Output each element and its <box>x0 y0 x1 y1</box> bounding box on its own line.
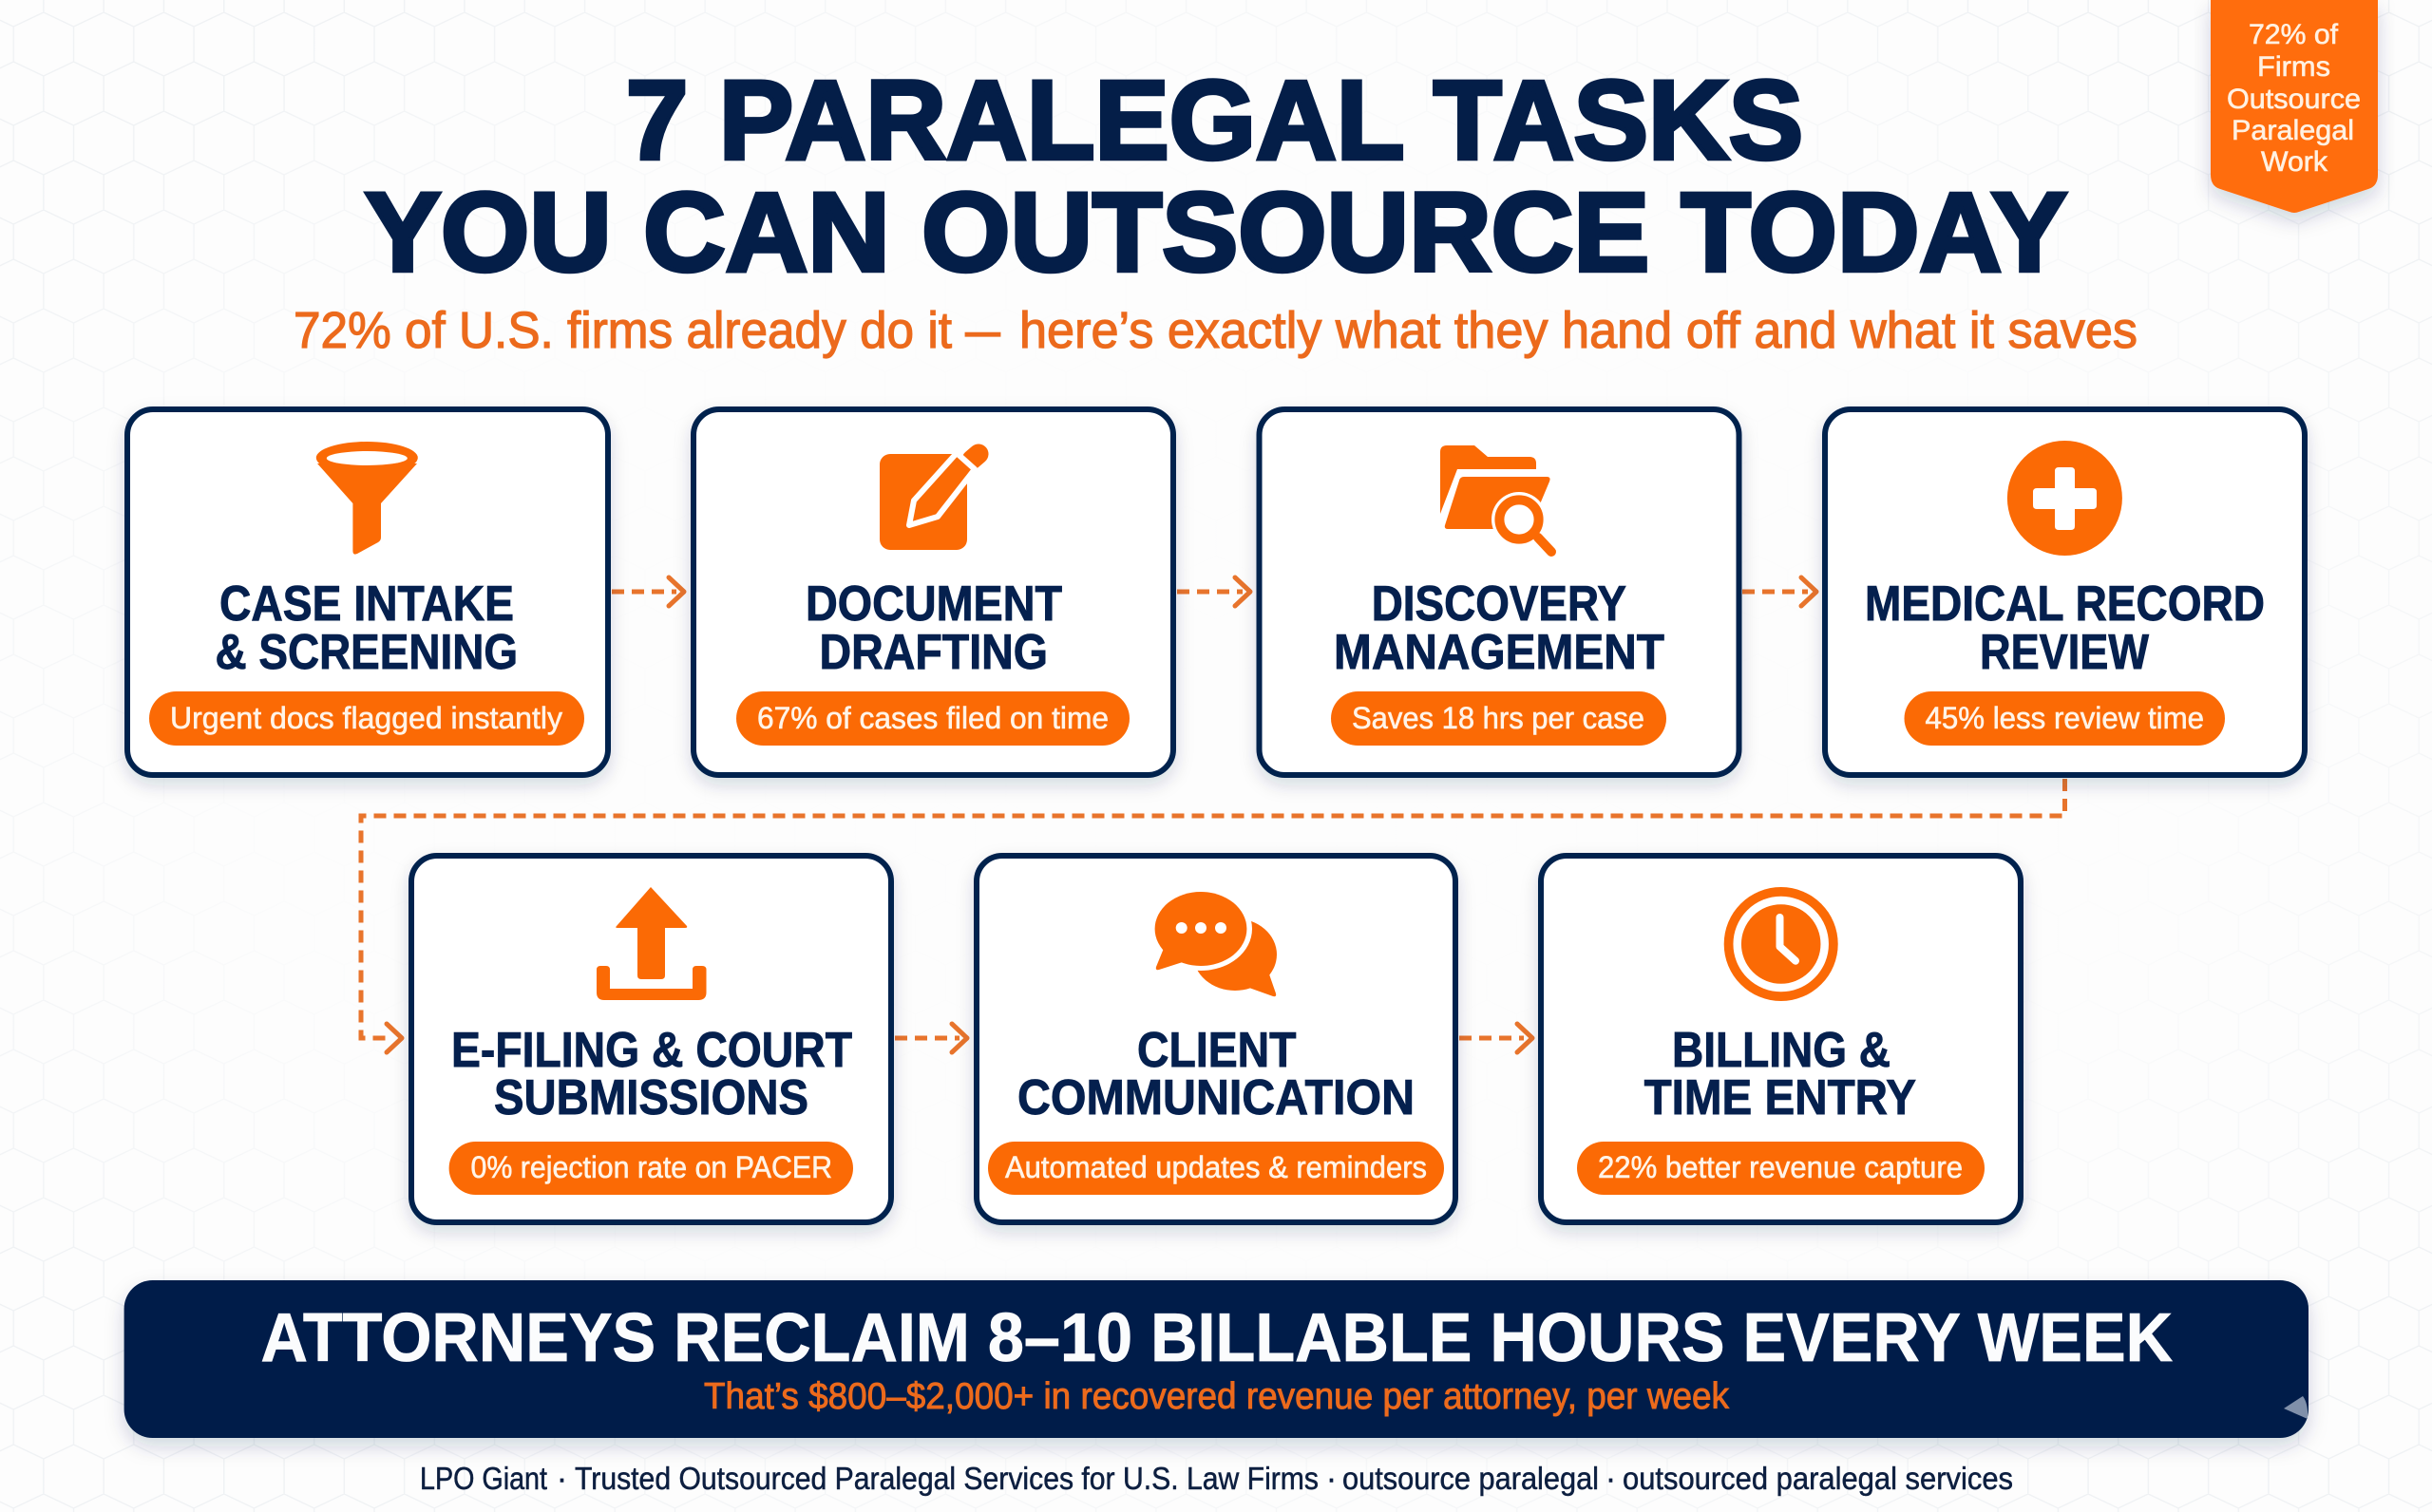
footer: outsource paralegal <box>1342 1461 1599 1496</box>
arrow: card 2 to 3 <box>1177 577 1250 606</box>
heading: REVIEW <box>1980 625 2150 680</box>
icon: clock <box>1724 887 1838 1001</box>
panel: client communication <box>977 856 1455 1222</box>
heading: CLIENT <box>1137 1023 1297 1078</box>
ribbon badge: 72% of <box>2249 19 2339 50</box>
ribbon badge: Outsource <box>2227 84 2361 115</box>
arrow: card 6 to 7 <box>1459 1024 1532 1052</box>
stat pill <box>1331 691 1666 746</box>
heading <box>1334 576 1664 680</box>
stat pill: 0% rejection rate on PACER <box>471 1150 832 1184</box>
stat pill <box>1577 1142 1985 1195</box>
title: 7 PARALEGAL TASKS <box>626 58 1803 183</box>
icon: pencil on page <box>880 453 978 550</box>
footer: outsourced paralegal services <box>1623 1461 2013 1496</box>
footer: · <box>1606 1461 1616 1496</box>
icon: medical cross <box>2007 441 2122 556</box>
heading: & SCREENING <box>215 625 518 680</box>
heading: DISCOVERY <box>1372 576 1626 632</box>
heading: TIME ENTRY <box>1644 1070 1916 1125</box>
heading: COMMUNICATION <box>1017 1070 1415 1125</box>
stat pill: Urgent docs flagged instantly <box>170 701 562 735</box>
heading <box>1644 1023 1916 1125</box>
banner headline: ATTORNEYS RECLAIM 8–10 BILLABLE HOURS EVERY WEEK <box>260 1300 2173 1376</box>
subtitle: here’s exactly what they hand off and what it saves <box>1019 302 2138 359</box>
stat pill <box>149 691 584 746</box>
subtitle: 72% of U.S. firms already do it <box>294 302 952 359</box>
panel: e-filing <box>411 856 891 1222</box>
stat pill <box>449 1142 853 1195</box>
stat pill: 45% less review time <box>1925 701 2204 735</box>
footer <box>420 1461 2013 1496</box>
subtitle <box>294 302 2138 359</box>
icon: funnel <box>316 442 418 555</box>
title <box>365 58 2067 295</box>
stat pill: 22% better revenue capture <box>1598 1150 1963 1184</box>
panel: discovery management <box>1260 409 1738 775</box>
icon: chat bubbles <box>1150 887 1277 996</box>
ribbon badge: Firms <box>2257 51 2330 83</box>
footer: · <box>557 1461 567 1496</box>
ribbon badge: Paralegal <box>2232 115 2354 146</box>
ribbon badge: Work <box>2261 146 2328 178</box>
heading <box>1865 576 2265 680</box>
arrow: card 3 to 4 <box>1742 577 1816 606</box>
stat pill <box>988 1142 1444 1195</box>
banner subtext: That’s $800–$2,000+ in recovered revenue per attorney, per week <box>704 1376 1729 1417</box>
ribbon badge <box>2211 0 2378 213</box>
banner <box>124 1280 2308 1438</box>
icon: upload arrow <box>597 887 707 1000</box>
panel: billing and time entry <box>1541 856 2021 1222</box>
footer: · <box>1326 1461 1337 1496</box>
heading: BILLING & <box>1672 1023 1890 1078</box>
title: YOU CAN OUTSOURCE TODAY <box>365 170 2067 295</box>
heading <box>451 1023 852 1125</box>
heading: MEDICAL RECORD <box>1865 576 2265 632</box>
footer: LPO Giant <box>420 1461 547 1496</box>
panel: case intake <box>127 409 608 775</box>
heading: E-FILING & COURT <box>451 1023 852 1078</box>
stat pill <box>736 691 1130 746</box>
connector: row 1 to row 2 <box>361 779 2065 1052</box>
stat pill: Automated updates & reminders <box>1005 1150 1427 1184</box>
icon: folder with magnifier <box>1440 445 1551 552</box>
heading: MANAGEMENT <box>1334 625 1664 680</box>
arrow: card 1 to 2 <box>612 577 684 606</box>
stat pill: Saves 18 hrs per case <box>1352 701 1644 735</box>
heading: DOCUMENT <box>806 576 1062 632</box>
panel: medical record review <box>1825 409 2305 775</box>
banner corner mark <box>2284 1396 2308 1419</box>
subtitle: — <box>965 302 1000 359</box>
heading <box>1017 1023 1415 1125</box>
arrow: card 5 to 6 <box>895 1024 967 1052</box>
footer: Trusted Outsourced Paralegal Services for U.S. Law Firms <box>575 1461 1319 1496</box>
stat pill <box>1904 691 2225 746</box>
heading: SUBMISSIONS <box>494 1070 808 1125</box>
heading <box>806 576 1062 680</box>
heading: DRAFTING <box>819 625 1048 680</box>
panel: document drafting <box>694 409 1173 775</box>
heading <box>215 576 518 680</box>
stat pill: 67% of cases filed on time <box>757 701 1109 735</box>
heading: CASE INTAKE <box>219 576 514 632</box>
